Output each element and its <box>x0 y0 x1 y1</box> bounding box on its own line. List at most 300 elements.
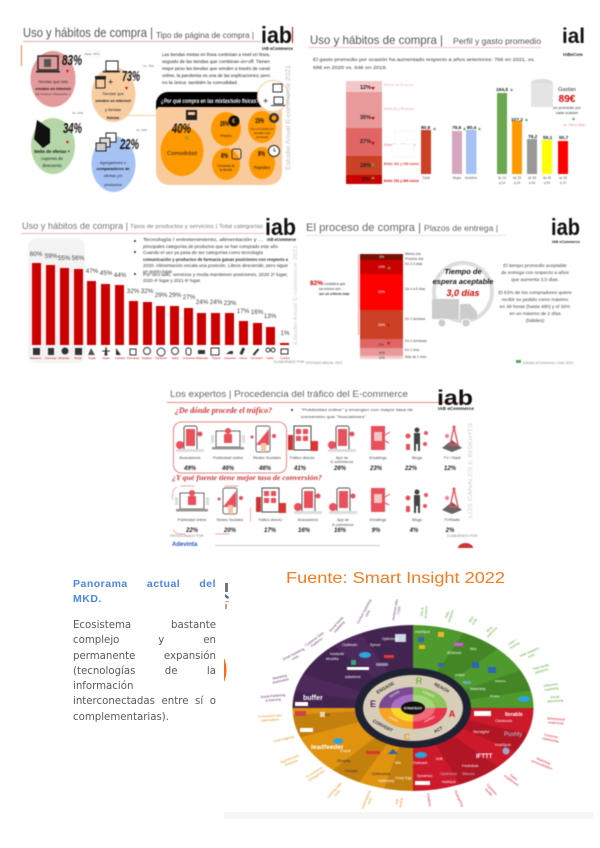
chart labels: porcentajes: 56% <box>72 255 85 262</box>
chart: stacked frecuencia: 12% <box>360 85 371 91</box>
chart: stacked frecuencia: 27% <box>360 139 371 145</box>
row: fuentes de tráfico: Emailings <box>369 455 387 460</box>
panel: por qué compra online: cercanas <box>256 135 269 139</box>
radial labels: Content marketing <box>356 599 372 624</box>
logos: cuadrante red: HubSpot <box>442 780 456 784</box>
chart labels: porcentajes: 55% <box>58 255 71 262</box>
chart: plazos apilado: 13% <box>378 265 385 269</box>
icon captions: Gafas <box>266 356 274 360</box>
panel: tipos de productos: ELABORADO POR <box>274 360 305 364</box>
iab logo cropped: ial <box>562 25 585 48</box>
radial labels: tools <box>367 797 373 805</box>
circle: agregadores 22%: ofertas y/o <box>104 173 123 178</box>
circle: tiendas online 83%: venden en internet <box>35 86 71 91</box>
footer: anunciantes y elaboración: PATROCINADO POR <box>170 534 204 538</box>
radial labels: Social <box>550 695 560 699</box>
ring outer quadrants <box>290 620 535 800</box>
callout: gastan 89€: 89€ <box>559 94 576 105</box>
footer: anunciantes y elaboración <box>170 534 478 548</box>
radial labels: Retargeting <box>453 790 464 807</box>
chart: barras categorías <box>32 263 289 345</box>
panel: plazos de entrega <box>306 214 581 365</box>
panel: por qué compra online: tiendas más <box>254 131 271 135</box>
row: tasa de conversión: Blogs <box>412 518 422 522</box>
chart: gasto por edad: a 70 <box>560 181 566 185</box>
sidebar: estudio anual: Estudio Anual E-commerce 2021 <box>286 64 292 170</box>
logos: cuadrante red: Drift <box>436 757 442 761</box>
text: bullet expertos: "Publicidad online" y emergen con mayor tasa de <box>301 407 414 412</box>
logos: cuadrante red: Outreach <box>413 761 427 765</box>
chart: plazos apilado: En 1 mes <box>405 348 420 352</box>
radial labels: email tools <box>548 720 564 726</box>
row: fuentes de tráfico: 46% <box>221 466 235 472</box>
heading: perfil y gasto: Uso y hábitos de compra | <box>310 33 443 47</box>
callout: gastan 89€: Gastan <box>558 87 576 93</box>
callout: 82%: ser un criterio más <box>319 292 349 296</box>
icon captions: Tickets <box>212 356 221 360</box>
circle: tiendas mixtas 73%: Vs. 75% <box>143 64 155 68</box>
heading: proceso de compra <box>306 222 498 234</box>
icon captions: Comunicac. <box>45 356 57 360</box>
text: bullets categorías: comunicación y productos de farmacia ganan posiciones con respecto a <box>143 257 289 262</box>
radial labels: Web analytics <box>519 646 540 658</box>
panel: por qué compra online: 26% <box>220 121 229 128</box>
logos: cuadrante purple: Mozilla <box>326 656 339 661</box>
hub labels: ACT <box>433 725 444 734</box>
logos: cuadrante orange: Crazy Egg <box>395 776 411 780</box>
panel: por qué compra online: + <box>263 96 268 106</box>
chart: stacked frecuencia: Entre 101 y 150 euros <box>384 162 419 166</box>
radial labels: Site & <box>420 607 424 616</box>
logos: cuadrante orange: Drupal <box>340 749 351 753</box>
radial labels: A/B <box>395 799 399 805</box>
sidebar: estudio lateral: LOS CANALES E INSIGHTS <box>468 422 474 518</box>
radial labels: Payment and <box>280 754 299 765</box>
chart labels: porcentajes: 24% <box>196 299 209 306</box>
panel: por qué compra online: Comodidad <box>167 151 197 157</box>
text block: panorama actual del MKD: Ecosistema bastante <box>73 620 216 631</box>
row: tasa de conversión: 20% <box>223 528 237 534</box>
footer: anunciantes y elaboración: Adevinta <box>172 542 198 548</box>
panel: por qué compra online: € <box>232 119 236 125</box>
icon captions: Transporte <box>155 356 167 360</box>
circle: webs de ofertas 34%: descuento <box>42 163 62 168</box>
text block: panorama actual del MKD: información <box>73 681 133 692</box>
chart: gasto por edad: 107,2 <box>511 117 523 123</box>
panel: por qué compra online <box>156 80 288 185</box>
icon captions: Farmacia <box>127 356 139 360</box>
logos: cuadrante green: HubSpot <box>415 630 431 634</box>
text block: panorama actual del MKD: permanente expansión <box>73 651 216 662</box>
row: tasa de conversión: 2% <box>445 528 455 534</box>
radial labels: Landing page <box>326 782 342 799</box>
chart labels: porcentajes: 60% <box>30 251 43 258</box>
text block: panorama actual del MKD: interconectadas entre sí o <box>73 696 216 707</box>
circle: agregadores 22%: Vs. 24% <box>136 128 148 132</box>
chart: plazos apilado: 33% <box>378 290 385 294</box>
logos: cuadrante green: Marketo <box>495 679 506 683</box>
logos: cuadrante green: Eloqua <box>490 694 500 698</box>
row: tasa de conversión: Publicidad online <box>178 518 206 522</box>
text: plazos explicación: El 63% de los compradores quiere <box>498 290 572 296</box>
radial labels: Audience data <box>391 599 399 621</box>
heading: mejor tasa de conversión: ¿Y qué fuente tiene mejor tasa de conversión? <box>172 473 322 482</box>
logos: cuadrante purple: Sprout <box>370 643 380 647</box>
radial labels: & listening <box>266 697 281 703</box>
text: gasto aumenta <box>313 57 535 70</box>
heading: tipos de productos <box>22 221 263 232</box>
panel: por qué compra online: 8% <box>258 151 266 158</box>
radial labels: Customer <box>485 783 498 796</box>
chart labels: porcentajes: 16% <box>251 309 264 316</box>
row: fuentes de tráfico: Redes Sociales <box>253 455 281 460</box>
iab logo: IAB eCommerce <box>552 239 581 244</box>
row: fuentes de tráfico: E-commerce <box>331 459 354 464</box>
heading: proceso de compra: Plazos de entrega | <box>424 224 498 233</box>
icon captions: Mascotas <box>196 356 209 360</box>
icon captions: Moda <box>74 356 82 360</box>
title: fuente smart insight: Fuente: Smart Insight 2022 <box>286 570 505 587</box>
callout: gastan 89€: cada ocasión <box>556 111 578 115</box>
text: bullets categorías: principales categorías de productos que se han comprado este año <box>143 244 279 249</box>
callout: 82%: 82% <box>310 280 323 287</box>
icon captions: Formación <box>251 356 263 360</box>
chart: gasto por edad: a 54 <box>544 181 550 185</box>
chart labels: porcentajes: 44% <box>114 272 127 279</box>
chart: rueda smart insights <box>258 599 565 811</box>
icon captions <box>30 356 290 360</box>
radial labels: / CDP <box>396 605 402 615</box>
radial labels: Platforms <box>310 637 324 648</box>
chart: gasto por edad: de 55 <box>559 176 567 180</box>
chart: plazos apilado: Próximo día <box>405 257 423 261</box>
text: bullets categorías: Cuando el uso ya pasa de ser categorías como tecnología <box>143 250 264 255</box>
chart labels: porcentajes: 24% <box>210 299 223 306</box>
radial labels: relationship <box>542 736 559 744</box>
text: introducción tiendas: online, la pandemia es una de las explicaciones; pero <box>162 73 270 78</box>
text: bullets categorías <box>134 237 289 283</box>
circle: tiendas mixtas 73%: 73% <box>122 68 140 85</box>
chart: stacked frecuencia: 35% <box>360 115 371 121</box>
icon row: categorías <box>33 347 288 356</box>
chart: gasto por edad: de 35 <box>528 176 536 180</box>
chart: stacked frecuencia: 18% <box>360 163 371 169</box>
icon captions: Alimentac. <box>58 356 70 360</box>
hub labels: REACH <box>433 682 450 694</box>
heading: panorama: Panorama actual del <box>73 578 216 590</box>
row: fuentes de tráfico: 41% <box>293 466 307 472</box>
hub labels: OWNED <box>424 714 436 724</box>
chart: gasto por edad: de 16 <box>498 176 506 180</box>
circle: tiendas mixtas 73%: físicas <box>107 115 120 120</box>
radial labels: checkout <box>284 758 298 767</box>
callout: tiempo de espera 3,0 días: 3,0 días <box>446 288 480 298</box>
radial labels: advertising <box>547 698 563 704</box>
radial labels: personalisation <box>531 759 553 771</box>
logos: cuadrante purple: Optimizely <box>382 637 399 641</box>
chart: gasto por sexo <box>392 125 481 180</box>
decor: logo vertical pequeño <box>225 583 229 609</box>
chart labels: porcentajes: 32% <box>141 288 154 295</box>
chart: stacked frecuencia: Entre 151 y 300 euros <box>384 179 419 183</box>
radial labels: Lead magnets <box>273 735 295 743</box>
icon captions: Juguetes <box>224 356 237 360</box>
icon captions: Hogar <box>88 356 96 360</box>
chart: gasto por edad: 50,7 <box>559 135 569 141</box>
chart labels: porcentajes: 29% <box>155 292 168 299</box>
text: plazos explicación <box>498 263 572 324</box>
iab logo: iab <box>261 22 292 48</box>
circle: agregadores 22%: Agregadores o <box>100 160 127 165</box>
radial labels: Sales <box>509 773 518 781</box>
chart: stacked frecuencia: Menos de 25 euros <box>384 83 413 87</box>
row: fuentes de tráfico: 26% <box>333 466 347 472</box>
logos: cuadrante purple: salesforce <box>345 675 361 679</box>
radial labels: SEO <box>468 615 475 623</box>
radial labels: Social Publishing <box>260 693 286 699</box>
row: fuentes de tráfico: Aps de <box>336 455 349 460</box>
text: plazos explicación: (hábiles) <box>526 318 545 324</box>
chart: gasto por edad: 79,2 <box>528 134 538 140</box>
footer strip <box>224 812 593 819</box>
chart: gasto por sexo: Total <box>422 176 430 180</box>
hub labels: STRATEGY <box>404 706 423 710</box>
logos: cuadrante green: Moz <box>470 647 477 651</box>
heading: tipos de productos: Uso y hábitos de compra | <box>22 221 128 232</box>
radial labels: platforms <box>535 667 549 675</box>
panel: por qué compra online: Rapidez <box>254 165 271 170</box>
radial labels: tools <box>364 609 371 617</box>
chart: stacked frecuencia: 8% <box>362 177 370 183</box>
icon captions: Libros <box>239 356 247 360</box>
text: introducción tiendas: mejor peso las tiendas que venden a través de canal <box>162 66 270 71</box>
logos: cuadrante red <box>413 711 523 785</box>
radial labels: platforms <box>486 626 499 638</box>
icon captions: Accesorios <box>183 356 196 360</box>
radial labels: Customer <box>544 733 559 739</box>
row: fuentes de tráfico: Publicidad online <box>213 455 244 460</box>
text: bullets categorías: Tecnología / entretenimiento, alimentación y ... <box>143 237 263 242</box>
row: fuentes de tráfico: 22% <box>404 466 418 472</box>
callout: gastan 89€ <box>531 79 585 127</box>
row: fuentes de tráfico: 12% <box>444 466 457 472</box>
text: plazos explicación: de entrega con respecto a años <box>501 270 569 276</box>
radial labels: marketing <box>333 620 346 634</box>
radial labels: Marketing <box>272 673 287 681</box>
radial labels: Marketing <box>536 757 551 766</box>
chart labels: porcentajes: 59% <box>45 253 58 260</box>
panel: por qué compra online: Precio <box>220 133 232 138</box>
circle: tiendas online 83% <box>30 51 100 107</box>
logos: cuadrante orange <box>295 711 411 783</box>
heading: proceso de compra: El proceso de compra | <box>306 222 421 234</box>
text: gasto aumenta: 68€ en 2020 vs. 64€ en 2019. <box>313 65 387 70</box>
radial labels: analytics <box>447 609 455 623</box>
chart labels: porcentajes: 17% <box>237 308 250 315</box>
iab logo: iab <box>265 214 296 240</box>
chart labels: porcentajes <box>30 251 290 337</box>
panel: por qué compra online: Cercanía de <box>217 164 235 168</box>
chart: gasto por edad: 184,5 <box>496 87 508 93</box>
text block: panorama actual del MKD: (tecnologías de la <box>73 666 216 677</box>
row: tasa de conversión: 17% <box>264 528 277 534</box>
icon captions: Regalos <box>142 356 153 360</box>
callout: gastan 89€: Vs. 77€ en 2020 <box>563 123 585 127</box>
hub labels: SALES <box>388 715 399 723</box>
text: introducción tiendas: seguido de las tiendas que combinan on+off. Tienen <box>162 59 271 64</box>
logos: cuadrante purple <box>295 634 406 706</box>
text: gasto aumenta: El gasto promedio por ocasión ha aumentado respecto a años anteriores: 76€ en 2021, vs. <box>313 57 535 62</box>
logos: cuadrante orange: Optimizely <box>378 779 395 783</box>
text: bullets categorías: 2020. Alimentación escala una posición. Libros desciende, pero sigue <box>143 263 289 268</box>
heading: los expertos: Los expertos | Procedencia del tráfico del E-commerce <box>170 389 408 399</box>
row: fuentes de tráfico: Buscadores <box>179 455 201 460</box>
panel: tipos de productos <box>21 214 305 364</box>
logos: cuadrante red: Sendgrid <box>473 729 489 734</box>
radial labels: Influencer <box>543 682 558 688</box>
chart: gasto por sexo: Mujer <box>453 176 462 180</box>
footer: anunciantes y elaboración: ELABORADO POR <box>447 534 478 538</box>
heading: de dónde procede: ¿De dónde procede el tráfico? <box>175 406 272 415</box>
row: fuentes de tráfico: Tráfico directo <box>289 455 315 460</box>
hub labels: E <box>370 699 376 709</box>
footer note <box>306 360 574 365</box>
callout: 82%: los envíos son ... <box>319 287 345 291</box>
circle: webs de ofertas 34%: Webs de ofertas + <box>34 149 70 154</box>
circle: tiendas online 83%: (Ej: Amazon, Aliexpress...) <box>35 92 71 96</box>
row: tasa de conversión: TV/Radio <box>444 518 460 522</box>
chart: plazos apilado: En 2-3 días <box>405 262 423 266</box>
radial labels: marketing <box>544 686 559 692</box>
chart: gasto por sexo: Hombre <box>465 176 477 180</box>
logos: cuadrante red: Dynamics <box>417 774 433 778</box>
row: tasa de conversión: E-commerce <box>332 523 354 527</box>
icon: camión entrega <box>432 263 492 327</box>
iab logo: IAB eCommerce <box>438 406 475 411</box>
row: fuentes de tráfico <box>176 426 462 472</box>
circle: agregadores 22%: comparadores de <box>96 166 130 171</box>
callout: 82% <box>310 254 359 335</box>
radial labels: management <box>307 769 326 782</box>
logos: cuadrante red: Pushly <box>504 732 522 738</box>
row: fuentes de tráfico: Blogs <box>412 455 422 460</box>
circle: tiendas online 83%: Base: 83% <box>85 52 100 56</box>
iab logo: iab <box>551 214 580 240</box>
text: introducción tiendas <box>162 52 271 85</box>
chart: plazos apilado: En 2 semanas <box>405 339 427 343</box>
chart: gasto por sexo: 79,6 <box>452 125 462 131</box>
logos: cuadrante orange: leadfeeder <box>311 744 344 751</box>
iab logo: IAB eCommerce <box>262 46 293 51</box>
logos: cuadrante orange: Unbounce <box>372 771 391 776</box>
logos: cuadrante red: IFTTT <box>476 754 493 760</box>
circle: tiendas mixtas 73%: Tiendas que <box>102 91 125 96</box>
row: fuentes de tráfico: TV / Radi <box>444 455 460 460</box>
radial labels: tools <box>333 789 341 797</box>
footer note: Estudio eCommerce | Julio 2021 <box>523 361 574 365</box>
text block: panorama actual del MKD: MKD. <box>73 593 102 605</box>
logos: cuadrante orange: Shopify <box>337 758 350 763</box>
radial labels: enablement <box>503 774 519 787</box>
row: tasa de conversión: Tráfico directo <box>258 518 282 522</box>
chart: gasto por edad: a 44 <box>529 181 535 185</box>
radial labels <box>258 599 565 811</box>
chart: stacked frecuencia: Entre 51 y 100 euros <box>384 143 416 147</box>
text: plazos explicación: recibir su pedido como máximo <box>502 297 569 303</box>
circle: tiendas mixtas 73%: venden en internet <box>95 98 131 103</box>
radial labels: E-commerce <box>305 766 323 779</box>
circle: agregadores 22%: 22% <box>119 136 139 153</box>
panel: perfil y gasto promedio <box>308 25 585 185</box>
icon captions: Entretenim. <box>30 356 42 360</box>
callout: 82%: considera que <box>324 282 345 286</box>
logos: cuadrante orange: VWO <box>320 712 330 717</box>
row: tasa de conversión: Emailings <box>370 518 386 522</box>
icon captions: Calzado <box>115 356 126 360</box>
logos: cuadrante red: Optimove <box>440 771 458 776</box>
hub labels: EARNED <box>422 690 436 699</box>
callout: tiempo de espera 3,0 días: espera aceptable <box>433 277 493 286</box>
icon captions: Viajes <box>102 356 110 360</box>
text: bullet expertos: conversión que "buscadores" <box>301 414 367 419</box>
text: introducción tiendas: Las tiendas mixtas en línea continúan a nivel en línea, <box>162 52 270 57</box>
logos: cuadrante green: yotpo <box>455 672 466 677</box>
chart: plazos apilado: 2% <box>379 355 385 360</box>
callout: tiempo de espera 3,0 días <box>433 267 493 298</box>
heading: perfil y gasto <box>310 33 542 47</box>
chart: gasto por edad: 59,1 <box>543 135 553 141</box>
chart labels: porcentajes: 23% <box>224 300 237 307</box>
radial labels: CMS / <box>508 638 517 646</box>
radial labels: Data <box>444 611 450 619</box>
radial labels: keyword <box>423 606 429 619</box>
logos: cuadrante orange: Google <box>345 768 359 773</box>
panel: por qué compra online: la tienda <box>220 168 232 172</box>
heading: uso y hábitos, tipo de página: Tipo de página de compra | <box>156 30 254 40</box>
hub labels: CONVERT <box>372 718 394 733</box>
chart: stacked frecuencia: Entre 25 y 50 euros <box>384 107 414 111</box>
radial labels: loyalty <box>484 787 494 797</box>
radial labels: Heatmapping <box>361 790 372 809</box>
row: tasa de conversión: 4% <box>409 528 419 534</box>
text block: panorama actual del MKD: complejo y en <box>73 635 216 646</box>
text: plazos explicación: en un máximo de 2 días <box>509 311 561 317</box>
radial labels: tools <box>471 617 478 626</box>
radial labels: Behavioural <box>547 716 565 722</box>
chart: plazos apilado: 26% <box>378 323 385 327</box>
logos: cuadrante orange: Wix <box>395 761 401 765</box>
radial labels: Paid media <box>532 663 549 671</box>
text: bullets categorías: en quinto lugar. <box>143 269 173 274</box>
decor: acento naranja <box>224 658 226 682</box>
text: bullets categorías: Por otro lado, servicios y moda mantienen posiciones, 2020 2º lugar, <box>143 272 288 277</box>
row: tasa de conversión: Redes Sociales <box>217 518 243 522</box>
circle: agregadores 22%: productos <box>104 182 122 187</box>
panel: por qué compra online: 40% <box>171 120 191 136</box>
chart labels: porcentajes: 29% <box>169 292 182 299</box>
circle: webs de ofertas 34%: cupones de <box>41 156 63 161</box>
row: tasa de conversión: Buscadores <box>298 518 318 522</box>
hub rings <box>355 668 471 748</box>
footer note: ESTUDIO ANUAL 2021 <box>306 361 343 365</box>
logos: cuadrante red: Sitecore <box>462 772 475 776</box>
circle: webs de ofertas 34% <box>31 111 84 174</box>
chart: plazos apilado: De 4 a 5 días <box>405 287 425 291</box>
hub labels: R <box>416 676 423 686</box>
radial labels: tools <box>291 654 300 661</box>
row: tasa de conversión <box>175 488 462 534</box>
chart: plazos apilado: 7% <box>378 342 384 347</box>
